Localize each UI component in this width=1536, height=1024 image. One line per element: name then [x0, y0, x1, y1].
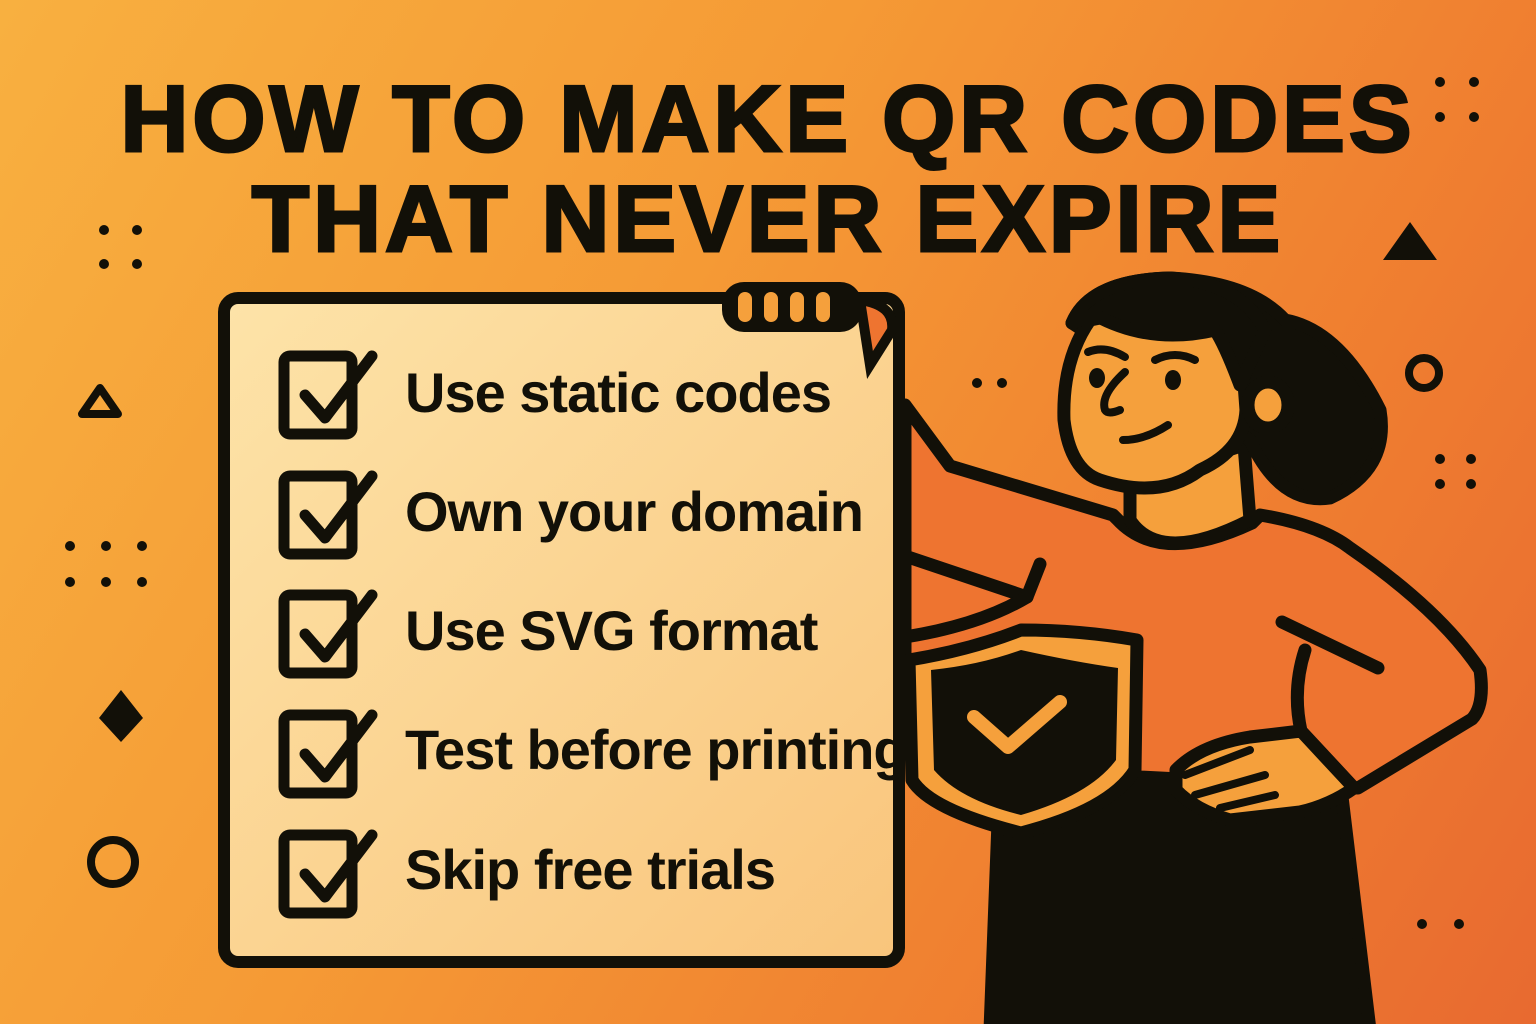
checkboxes [284, 356, 372, 913]
face [1064, 312, 1246, 488]
title: HOW TO MAKE QR CODES [120, 66, 1416, 171]
checklist board [218, 292, 905, 968]
ear [1248, 382, 1288, 428]
neck [1130, 445, 1250, 543]
hand [1176, 731, 1354, 820]
body shirt [905, 405, 1481, 788]
title [120, 66, 1416, 271]
text: Skip free trials [405, 838, 775, 901]
hair top [1072, 278, 1265, 385]
text: Test before printing [405, 718, 907, 781]
raised arm lower edge [905, 556, 1040, 597]
hip arm [1282, 622, 1378, 668]
text: Use SVG format [405, 599, 817, 662]
pants [990, 770, 1370, 1024]
hair back & bun [1072, 278, 1381, 499]
shield [909, 630, 1137, 833]
text: Own your domain [405, 480, 863, 543]
title: THAT NEVER EXPIRE [252, 166, 1284, 271]
decorative shapes [65, 77, 1479, 929]
checklist items: Use static codes [405, 361, 831, 424]
